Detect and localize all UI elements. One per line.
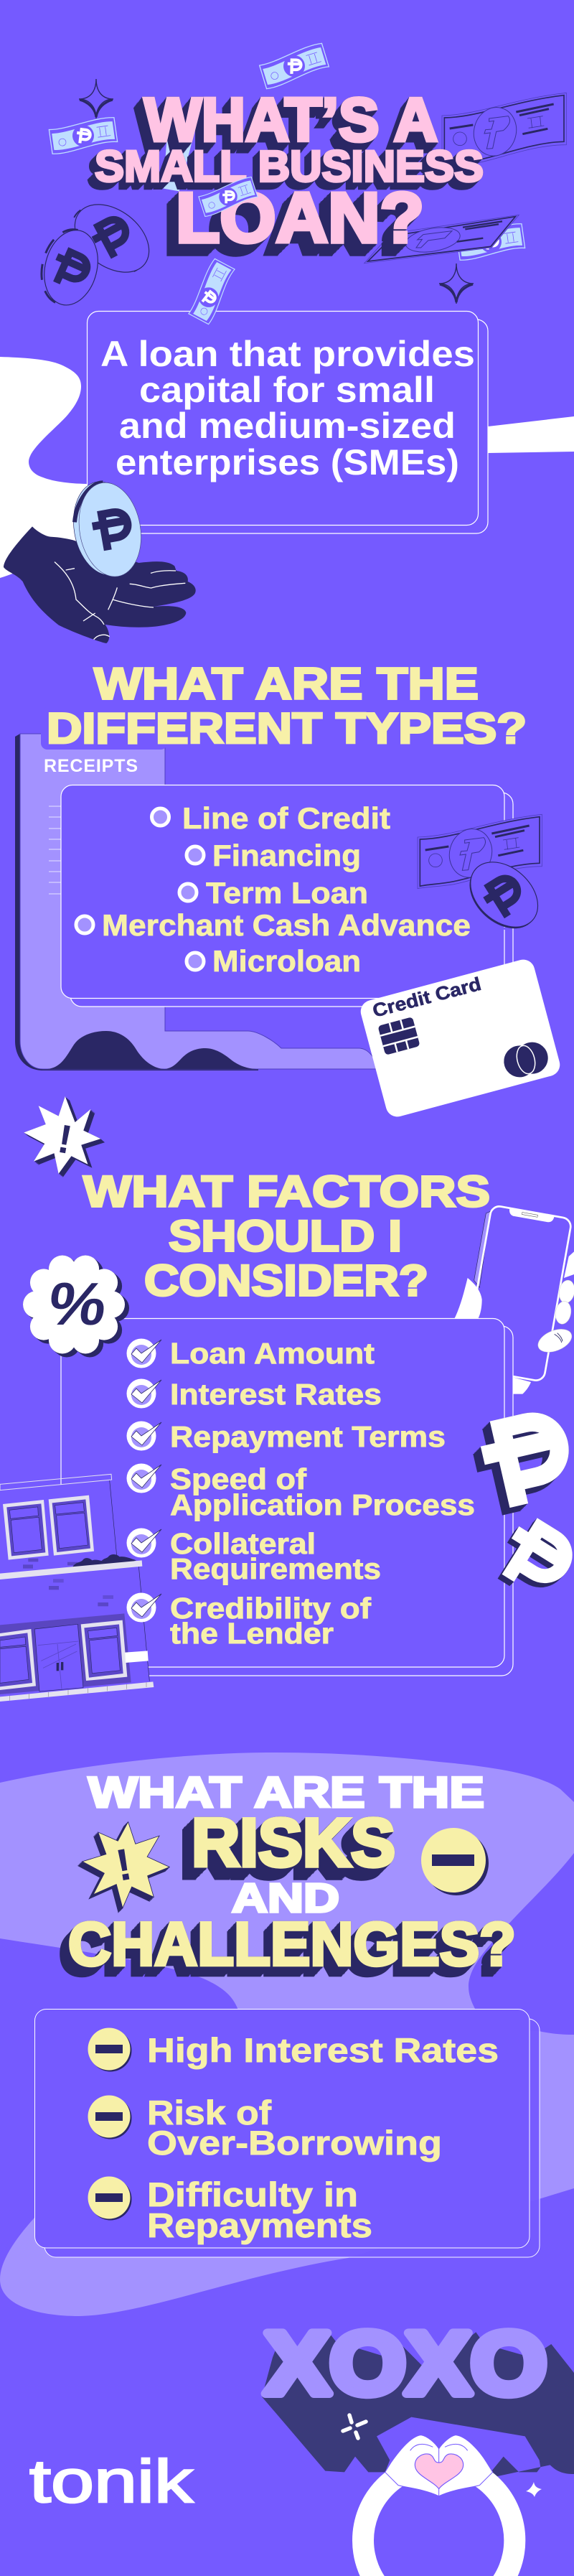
bush — [73, 1554, 136, 1567]
receipt curl hump 2 — [165, 1048, 258, 1069]
icon: credit card — [358, 957, 563, 1119]
panel: definition card — [88, 312, 488, 533]
phone side — [474, 1211, 490, 1287]
icon: outlined peso bill behind title — [442, 93, 566, 167]
icon: small bill behind title, partly hidden — [163, 139, 192, 192]
icon: percent badge: % — [44, 1270, 111, 1338]
illustration: building — [0, 1474, 154, 1702]
icon: exclamation starburst yellow: ! — [112, 1839, 136, 1891]
icon: outlined peso bill section 2 — [418, 814, 542, 889]
heading line 4: CHALLENGES? — [68, 1910, 516, 1979]
factor labels: Application Process — [170, 1488, 475, 1521]
bullets — [76, 808, 204, 970]
icon: second peso sign — [493, 1518, 574, 1601]
definition text: A loan that provides — [100, 334, 475, 374]
card network logo — [500, 1039, 552, 1081]
heading line 2: RISKS — [192, 1805, 395, 1881]
check icon: speed — [126, 1463, 161, 1493]
risk labels: High Interest Rates — [147, 2031, 499, 2069]
shop window left — [0, 1629, 36, 1690]
phone body — [464, 1205, 572, 1382]
loan type labels: Financing — [212, 839, 361, 872]
card back layer — [70, 793, 513, 1007]
arms ring — [363, 2465, 514, 2576]
fingers — [513, 1251, 574, 1394]
loan type labels: Merchant Cash Advance — [102, 908, 471, 942]
risk labels: Repayments — [147, 2206, 372, 2244]
icon: large minus circle — [421, 1828, 489, 1895]
minus icon 3 — [88, 2177, 132, 2220]
icon: peso coin section 2 — [457, 849, 550, 941]
icon: small diamond sparkle — [526, 2482, 542, 2497]
icon: flat outlined bill — [364, 215, 519, 263]
icon: four-arm sparkle — [343, 2415, 366, 2438]
icon: money bill lower right — [456, 223, 525, 261]
icon: sparkle left — [79, 79, 113, 118]
heading: what are the different types — [47, 659, 527, 752]
wall — [0, 1480, 149, 1697]
door — [34, 1624, 83, 1691]
heading halo over receipt — [41, 707, 167, 750]
card front layer — [61, 785, 504, 998]
heading: what are the risks and challenges — [68, 1768, 516, 1979]
heading: what are the different types: DIFFERENT TYPES? — [47, 704, 527, 752]
card body — [358, 957, 563, 1119]
card front layer — [88, 312, 478, 526]
card front layer — [34, 2009, 530, 2248]
title: What's a small business loan — [95, 86, 484, 257]
risk labels: Over-Borrowing — [147, 2124, 442, 2162]
card back layer — [70, 1326, 513, 1676]
receipt tick marks — [49, 806, 61, 894]
palm lines — [55, 562, 185, 640]
factor labels: Speed of — [170, 1462, 306, 1495]
icon: dark hand holding coin — [4, 477, 196, 643]
factor labels: Requirements — [170, 1552, 381, 1585]
factor labels: Collateral — [170, 1527, 316, 1560]
receipt label: RECEIPTS — [44, 756, 138, 776]
factor labels: the Lender — [170, 1617, 334, 1650]
heading line 1: WHAT ARE THE — [88, 1768, 484, 1816]
card label: Credit Card — [370, 973, 484, 1022]
check icon: credibility — [126, 1592, 161, 1623]
heading: what factors should I consider: SHOULD I — [169, 1212, 402, 1261]
check icon: interest rates — [126, 1378, 161, 1409]
chip — [377, 1017, 420, 1055]
card back layer — [95, 319, 488, 533]
icon: exclamation starburst white — [24, 1096, 100, 1174]
icon: percent badge — [23, 1255, 125, 1354]
pavement — [0, 1681, 154, 1702]
factor labels: Repayment Terms — [170, 1420, 446, 1453]
XOXO letters: XOXO — [265, 2315, 547, 2413]
icon: money bill left — [49, 117, 118, 154]
factor labels: Credibility of — [170, 1592, 371, 1625]
icon: exclamation starburst white: ! — [55, 1116, 75, 1162]
card back layer — [44, 2019, 540, 2257]
ledge — [0, 1560, 142, 1579]
shop window right — [81, 1620, 127, 1681]
check icon: repayment terms — [126, 1422, 161, 1450]
panel: factors card — [61, 1318, 513, 1676]
shopfront band — [0, 1613, 131, 1694]
risk labels — [147, 2031, 499, 2244]
receipt paper — [20, 734, 380, 1069]
title line 1: WHAT’S A — [144, 86, 438, 154]
pink heart — [415, 2454, 464, 2489]
title line 3: LOAN? — [176, 178, 424, 257]
white wave behind definition card — [0, 357, 574, 578]
factors checklist — [126, 1337, 475, 1650]
loan type labels: Microloan — [212, 944, 361, 978]
illustration: phone in hand — [454, 1205, 574, 1394]
upper window right — [49, 1495, 94, 1556]
icon: sparkle right — [439, 263, 474, 304]
receipt edge shadow — [15, 734, 258, 1070]
title line 2: SMALL BUSINESS — [95, 142, 484, 191]
heading: what factors should I consider: CONSIDER? — [144, 1256, 428, 1305]
icon: two peso coins — [34, 191, 162, 311]
risk labels: Risk of — [147, 2094, 271, 2132]
heading: what factors should I consider — [83, 1167, 490, 1305]
factor labels — [170, 1337, 475, 1650]
heading line 3: AND — [232, 1875, 339, 1921]
shop sign — [125, 1651, 149, 1663]
check icon: collateral — [126, 1528, 161, 1558]
icon: money bill over title — [198, 177, 258, 217]
minus icon 2 — [88, 2095, 132, 2139]
icon: heart hands — [363, 2435, 514, 2576]
definition text: capital for small — [139, 370, 435, 410]
loan type labels: Term Loan — [206, 876, 368, 910]
definition text: and medium-sized — [119, 406, 456, 446]
minus icon 1 — [88, 2027, 132, 2072]
definition text — [100, 334, 475, 482]
hand — [4, 526, 196, 643]
icon: money bill top — [258, 42, 330, 90]
panel: risks card — [34, 2009, 540, 2257]
panel: loan types card — [61, 785, 513, 1007]
risk labels: Difficulty in — [147, 2175, 358, 2213]
icon: money bill over card top edge — [186, 258, 237, 325]
hands — [385, 2435, 493, 2496]
heading: what factors should I consider: WHAT FACTORS — [83, 1167, 490, 1216]
upper window left — [3, 1500, 49, 1560]
loan type labels — [102, 801, 471, 978]
factor labels: Loan Amount — [170, 1337, 375, 1370]
bricks — [23, 1559, 113, 1606]
coin — [67, 477, 148, 582]
roof — [0, 1474, 112, 1490]
factor labels: Interest Rates — [170, 1378, 382, 1411]
receipt curl hump 1 — [47, 1031, 165, 1069]
coin back — [59, 191, 162, 287]
illustration: XOXO with long shadow — [262, 2315, 574, 2479]
background swoosh: upper — [0, 1753, 574, 2010]
icon: exclamation starburst yellow — [83, 1822, 169, 1908]
thumb — [454, 1278, 482, 1321]
card front layer — [61, 1318, 504, 1667]
background swoosh: lower — [0, 2031, 574, 2316]
coin front — [34, 224, 105, 311]
check icon: loan amount — [126, 1338, 161, 1368]
illustration: receipt — [15, 734, 380, 1070]
icon: large peso sign — [478, 1415, 574, 1511]
long shadow — [262, 2330, 574, 2479]
loan type labels: Line of Credit — [182, 801, 390, 835]
definition text: enterprises (SMEs) — [116, 442, 459, 482]
heading: what are the different types: WHAT ARE THE — [94, 659, 479, 709]
logo: tonik: tonik — [29, 2447, 194, 2515]
